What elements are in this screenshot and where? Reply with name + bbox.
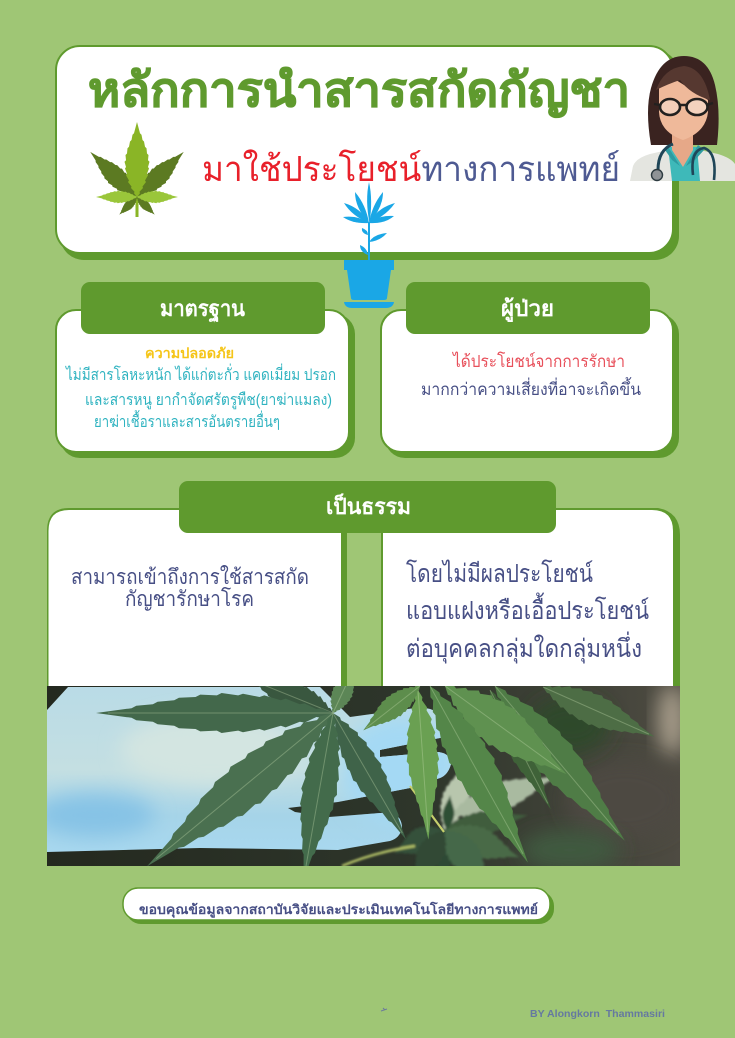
panel: patients card: [381, 310, 679, 458]
author credit: BY Alongkorn Thammasiri: [530, 1009, 665, 1020]
heading tab: standards: [81, 282, 325, 334]
standards text: และสารหนู ยากำจัดศรัตรูพืช(ยาฆ่าแมลง): [85, 391, 332, 410]
fairness right text: โดยไม่มีผลประโยชน์: [406, 559, 593, 588]
front hand leaf: [258, 686, 333, 713]
heading tab: patients: [406, 282, 650, 334]
heading tab: standards: มาตรฐาน: [160, 296, 245, 323]
fairness right text: แอบแฝงหรือเอื้อประโยชน์: [406, 592, 649, 625]
fairness left text: สามารถเข้าถึงการใช้สารสกัด: [71, 565, 309, 589]
panel: header: [56, 46, 679, 260]
fairness right text: [406, 559, 649, 664]
standards text: ยาฆ่าเชื้อราและสารอันตรายอื่นๆ: [94, 410, 280, 431]
icon: blue potted plant: [343, 182, 395, 308]
patients text: [421, 351, 641, 399]
panel: credits pill: ขอบคุณข้อมูลจากสถาบันวิจัยและประเมินเทคโนโลยีทางการแพทย์: [139, 901, 538, 918]
standards text: ไม่มีสารโลหะหนัก ได้แก่ตะกั่ว แคดเมี่ยม ปรอก: [64, 363, 336, 384]
blue glove: [47, 687, 453, 852]
fairness left text: [71, 565, 309, 611]
patients text: มากกว่าความเสี่ยงที่อาจะเกิดขึ้น: [421, 377, 641, 399]
fairness right text: ต่อบุคคลกลุ่มใดกลุ่มหนึ่ง: [406, 631, 642, 664]
heading tab: fairness: เป็นธรรม: [326, 492, 411, 519]
standards text: ความปลอดภัย: [145, 345, 234, 361]
photo: gloved hand holding cannabis leaf: [47, 686, 680, 866]
icon: cannabis leaf: [83, 122, 191, 218]
heading tab: fairness: [179, 481, 556, 533]
glove shading: [35, 714, 460, 837]
title: หลักการนำสารสกัดกัญชา: [88, 63, 630, 118]
panel: fairness cards: [47, 508, 680, 700]
icon: doctor: [630, 56, 735, 181]
background plant: [340, 774, 550, 866]
fairness left text: กัญชารักษาโรค: [125, 587, 254, 611]
patients text: ได้ประโยชน์จากการรักษา: [451, 351, 625, 371]
right plant leaves: [542, 686, 654, 736]
panel: credits pill: [123, 888, 554, 924]
heading tab: patients: ผู้ป่วย: [501, 296, 554, 323]
subtitle: มาใช้ประโยชน์ทางการแพทย์: [202, 149, 620, 189]
standards text: [64, 345, 336, 431]
panel: standards card: [56, 310, 355, 458]
